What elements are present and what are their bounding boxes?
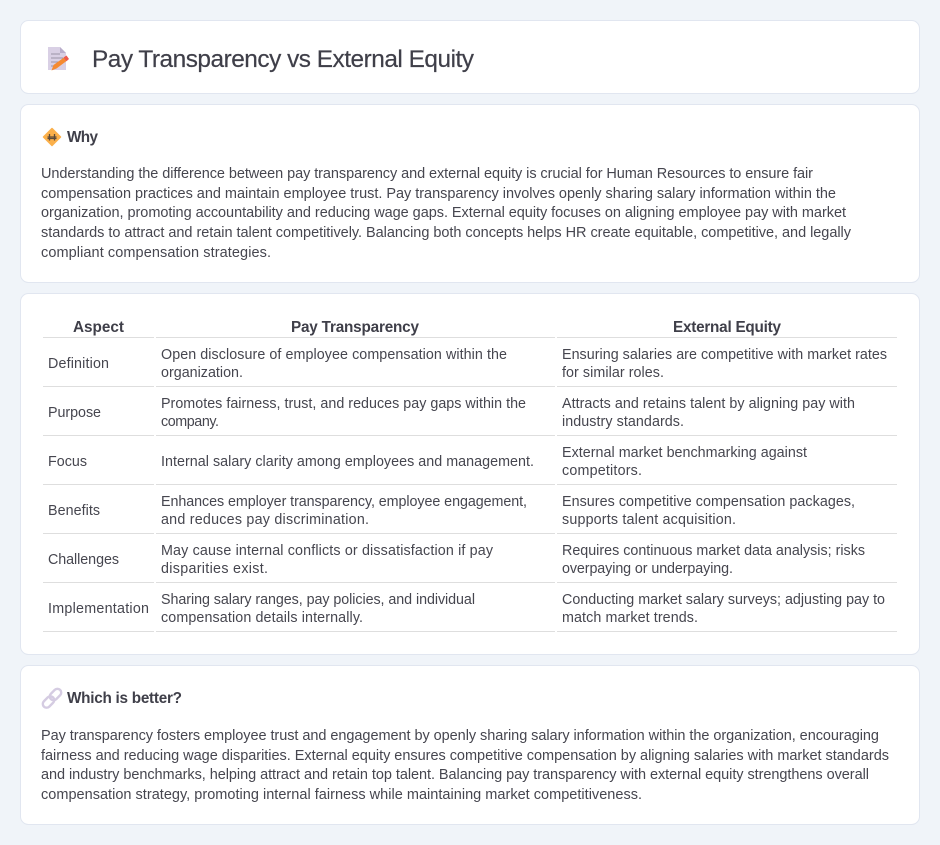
text block: why: standards to attract and retain talent competitively. Balancing both concepts helps HR create equitable, competitive, and legally [41, 225, 852, 241]
row: implementation: compensation details internally. [161, 610, 363, 626]
row: definition [43, 347, 897, 387]
row: definition: Definition [48, 356, 109, 372]
row: challenges: disparities exist. [161, 561, 268, 577]
row: focus: Focus [48, 454, 87, 470]
row: focus: External market benchmarking against [562, 445, 807, 461]
table header [43, 319, 897, 338]
row: implementation: Sharing salary ranges, pay policies, and individual [161, 592, 475, 608]
text block: which is better: and industry benchmarks, helping attract and retain top talent. Balancing pay transparency with external equity strengthens overall [41, 767, 869, 783]
panel: which is better [20, 666, 920, 824]
row: purpose: industry standards. [562, 414, 684, 430]
row: challenges [43, 543, 897, 583]
row: implementation: match market trends. [562, 610, 698, 626]
row: challenges: overpaying or underpaying. [562, 561, 733, 577]
text block: why: Understanding the difference between pay transparency and external equity is crucial for Human Resources to ensure fair [41, 166, 813, 182]
row: focus: Internal salary clarity among employees and management. [161, 454, 534, 470]
text block: which is better: fairness and reducing wage disparities. External equity ensures competitive compensation by aligning salaries with market standards [41, 748, 889, 764]
row: benefits: and reduces pay discrimination. [161, 512, 369, 528]
row: definition: Ensuring salaries are competitive with market rates [562, 347, 887, 363]
panel: header [20, 20, 920, 94]
row: purpose: Purpose [48, 405, 101, 421]
row: implementation: Conducting market salary surveys; adjusting pay to [562, 592, 885, 608]
heading: why: Why [67, 129, 98, 146]
row: purpose: company. [161, 414, 219, 430]
text block: which is better [41, 728, 889, 803]
row: implementation [43, 592, 897, 632]
table header: External Equity [673, 319, 781, 336]
row: benefits [43, 494, 897, 534]
row: challenges: Requires continuous market data analysis; risks [562, 543, 865, 559]
row: benefits: Enhances employer transparency, employee engagement, [161, 494, 527, 510]
row: challenges: Challenges [48, 552, 119, 568]
text block: why: organization, promoting accountability and reducing wage gaps. External equity focuses on aligning employee pay with market [41, 205, 846, 221]
row: definition: Open disclosure of employee compensation within the [161, 347, 507, 363]
row: purpose: Attracts and retains talent by aligning pay with [562, 396, 855, 412]
row: purpose [43, 396, 897, 436]
row: benefits: Ensures competitive compensation packages, [562, 494, 855, 510]
text block: why [41, 166, 852, 261]
table header: Aspect [73, 319, 124, 336]
icon: warning diamond [44, 128, 60, 146]
text block: why: compliant compensation strategies. [41, 245, 271, 261]
row: definition: for similar roles. [562, 365, 664, 381]
row: focus: competitors. [562, 463, 642, 479]
text block: which is better: Pay transparency fosters employee trust and engagement by openly sharing salary information within the organization, encouraging [41, 728, 879, 744]
icon: document with pencil [48, 47, 69, 70]
text block: which is better: compensation strategy, promoting internal fairness while maintaining market competitiveness. [41, 787, 642, 803]
row: benefits: Benefits [48, 503, 100, 519]
table header: Pay Transparency [291, 319, 419, 336]
row: challenges: May cause internal conflicts or dissatisfaction if pay [161, 543, 494, 559]
title: Pay Transparency vs External Equity [92, 46, 475, 73]
heading: which is better: Which is better? [67, 690, 182, 707]
panel: why [20, 104, 920, 282]
row: focus [43, 445, 897, 485]
row: definition: organization. [161, 365, 243, 381]
row: purpose: Promotes fairness, trust, and reduces pay gaps within the [161, 396, 526, 412]
panel: comparison table [20, 294, 920, 654]
row: implementation: Implementation [48, 601, 149, 617]
text block: why: compensation practices and maintain employee trust. Pay transparency involves openly sharing salary information within the [41, 186, 836, 202]
row: benefits: supports talent acquisition. [562, 512, 736, 528]
icon: chain link [41, 687, 63, 709]
